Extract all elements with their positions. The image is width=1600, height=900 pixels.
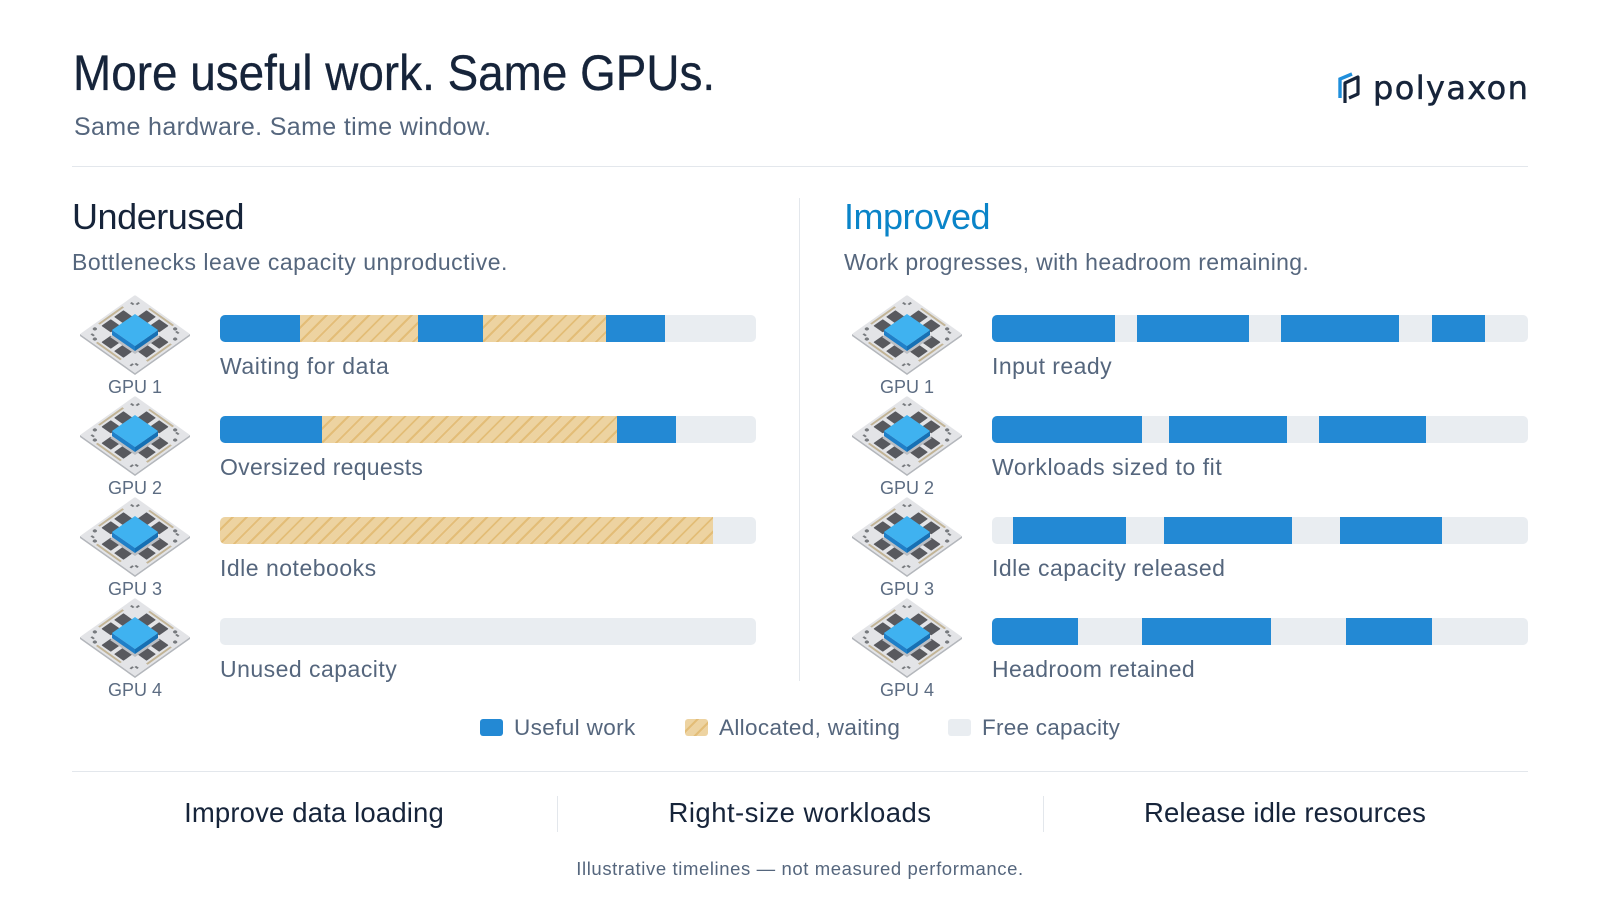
row: GPU 3: [80, 498, 756, 599]
legend: [480, 715, 1120, 740]
logo wordmark: polyaxon: [1373, 69, 1529, 107]
GPU 4 label: GPU 4: [880, 680, 934, 700]
legend swatch: useful work: [480, 719, 503, 736]
row: GPU 2: [852, 396, 1528, 498]
action: right-size workloads: Right-size workloads: [669, 797, 931, 828]
legend swatch: allocated, waiting: [685, 719, 708, 736]
legend swatch: free capacity: [948, 719, 971, 736]
subtitle: Same hardware. Same time window.: [74, 113, 491, 141]
heading: improved: Improved: [844, 196, 990, 237]
panel: underused: [72, 196, 756, 700]
icon: GPU 1 chip: [80, 296, 190, 375]
row: GPU 3: [852, 498, 1528, 599]
legend label: useful work: Useful work: [514, 715, 636, 740]
GPU 1 label: GPU 1: [108, 377, 162, 397]
timeline bar: GPU 1: [220, 315, 756, 342]
action: release idle resources: Release idle resources: [1144, 797, 1426, 828]
status: input ready: Input ready: [992, 353, 1112, 379]
timeline bar: GPU 1: [992, 315, 1528, 342]
GPU 4 label: GPU 4: [108, 680, 162, 700]
status: waiting for data: Waiting for data: [220, 353, 389, 379]
GPU 3 label: GPU 3: [108, 579, 162, 599]
timeline bar: GPU 4: [220, 618, 756, 645]
icon: GPU 3 chip: [852, 498, 962, 577]
icon: GPU 4 chip: [80, 598, 190, 678]
GPU 2 label: GPU 2: [108, 478, 162, 498]
title: More useful work. Same GPUs.: [73, 45, 715, 101]
icon: GPU 2 chip: [852, 396, 962, 476]
status: headroom retained: Headroom retained: [992, 656, 1195, 682]
GPU 3 label: GPU 3: [880, 579, 934, 599]
status: workloads sized to fit: Workloads sized to fit: [992, 454, 1222, 480]
row: GPU 2: [80, 396, 756, 498]
legend label: allocated, waiting: Allocated, waiting: [719, 715, 900, 740]
footnote: Illustrative timelines — not measured performance.: [576, 858, 1024, 879]
action: improve data loading: Improve data loading: [184, 797, 444, 828]
timeline bar: GPU 2: [992, 416, 1528, 443]
timeline bar: GPU 3: [992, 517, 1528, 544]
icon: GPU 4 chip: [852, 598, 962, 678]
timeline bar: GPU 3: [220, 517, 756, 544]
GPU 2 label: GPU 2: [880, 478, 934, 498]
panel description: Bottlenecks leave capacity unproductive.: [72, 249, 508, 275]
row: GPU 4: [80, 598, 756, 700]
row: GPU 1: [80, 296, 756, 397]
status: unused capacity: Unused capacity: [220, 656, 397, 682]
status: idle capacity released: Idle capacity released: [992, 555, 1225, 581]
icon: GPU 2 chip: [80, 396, 190, 476]
icon: GPU 3 chip: [80, 498, 190, 577]
row: GPU 1: [852, 296, 1528, 397]
status: idle notebooks: Idle notebooks: [220, 555, 377, 581]
status: oversized requests: Oversized requests: [220, 454, 423, 480]
panel: improved: [844, 196, 1528, 700]
panel description: Work progresses, with headroom remaining.: [844, 249, 1309, 275]
icon: polyaxon mark: [1338, 72, 1360, 103]
row: GPU 4: [852, 598, 1528, 700]
icon: GPU 1 chip: [852, 296, 962, 375]
heading: underused: Underused: [72, 196, 244, 237]
logo: polyaxon: [1338, 69, 1529, 107]
GPU 1 label: GPU 1: [880, 377, 934, 397]
legend label: free capacity: Free capacity: [982, 715, 1120, 740]
timeline bar: GPU 4: [992, 618, 1528, 645]
timeline bar: GPU 2: [220, 416, 756, 443]
